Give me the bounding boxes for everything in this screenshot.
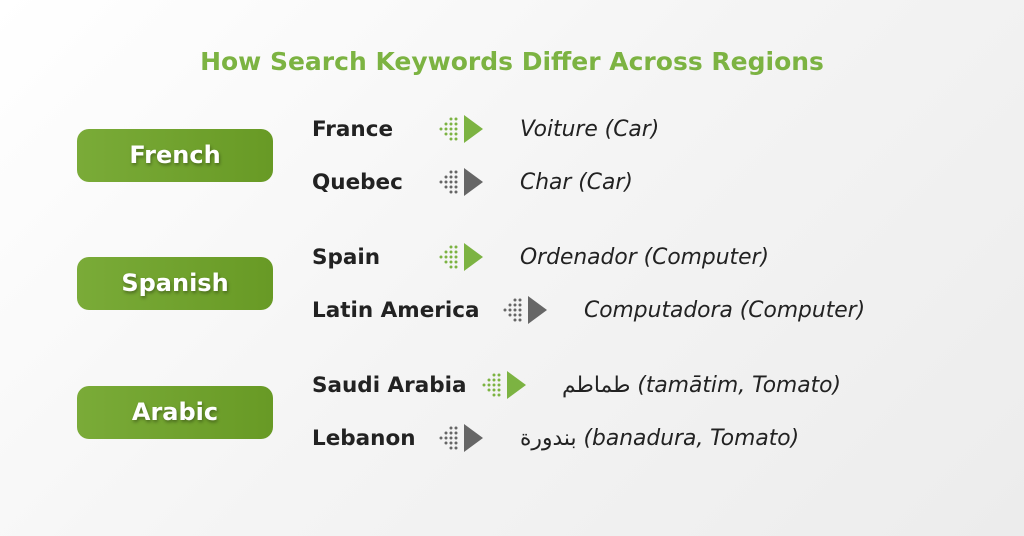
result: Voiture: Voiture (Car) bbox=[520, 117, 659, 142]
label: Quebec: Quebec bbox=[312, 170, 403, 195]
title: How Search Keywords Differ Across Regions bbox=[200, 47, 824, 76]
result: Computadora: Computadora (Computer) bbox=[584, 298, 865, 323]
pill: French bbox=[77, 129, 273, 182]
pill: Spanish: Spanish bbox=[121, 269, 229, 297]
pill: French: French bbox=[129, 141, 221, 169]
pill: Spanish bbox=[77, 257, 273, 310]
icon: arrow gray bbox=[440, 424, 483, 452]
result: tamatim: طماطم (tamātim, Tomato) bbox=[562, 373, 841, 398]
label: Saudi Arabia: Saudi Arabia bbox=[312, 373, 467, 398]
label: Latin America: Latin America bbox=[312, 298, 480, 323]
icon: arrow gray bbox=[504, 296, 547, 324]
result: Ordenador: Ordenador (Computer) bbox=[520, 245, 769, 270]
icon: arrow gray bbox=[440, 168, 483, 196]
result: banadura: بندورة (banadura, Tomato) bbox=[520, 426, 799, 451]
icon: arrow green bbox=[440, 243, 483, 271]
pill: Arabic bbox=[77, 386, 273, 439]
label: France: France bbox=[312, 117, 393, 142]
result: Char: Char (Car) bbox=[520, 170, 633, 195]
label: Lebanon: Lebanon bbox=[312, 426, 416, 451]
label: Spain: Spain bbox=[312, 245, 380, 270]
pill: Arabic: Arabic bbox=[132, 398, 218, 426]
icon: arrow green bbox=[440, 115, 483, 143]
icon: arrow green bbox=[482, 371, 526, 399]
